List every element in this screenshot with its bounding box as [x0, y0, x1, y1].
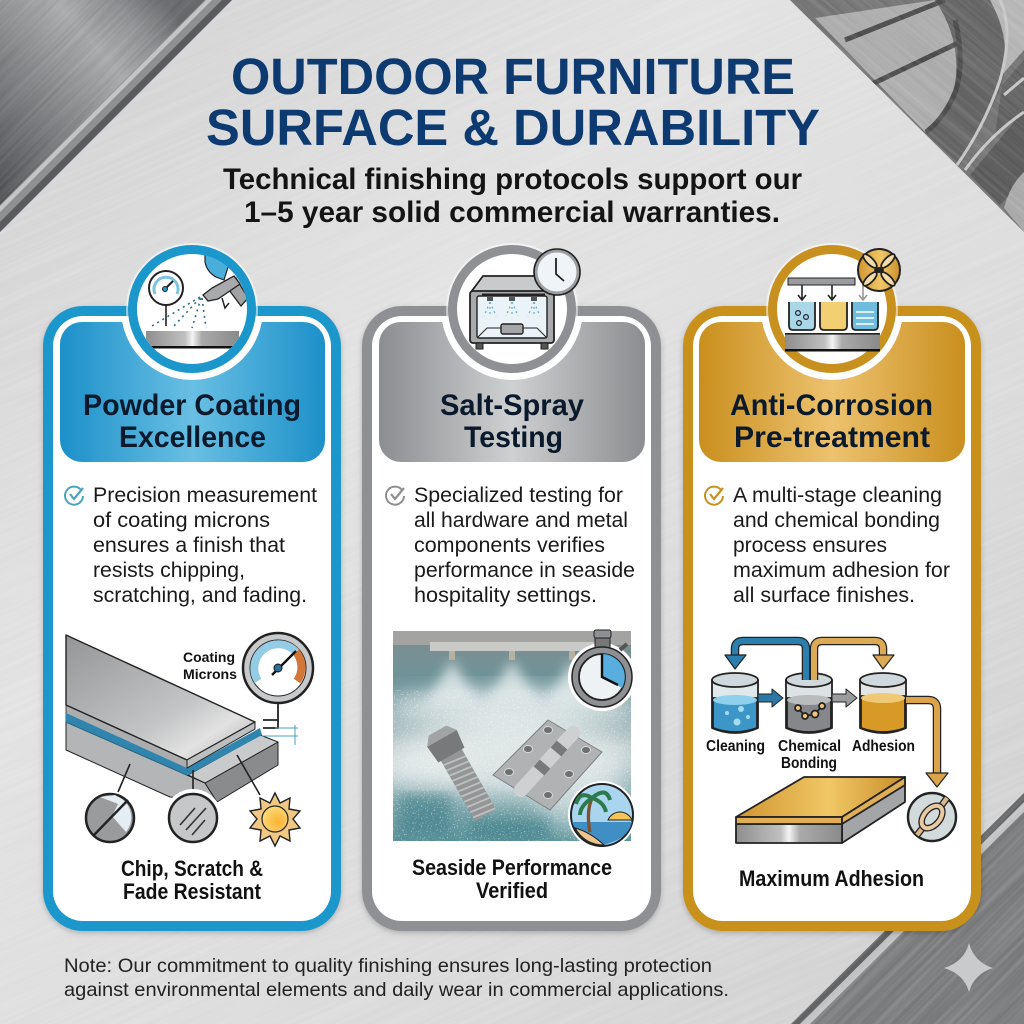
title: SURFACE & DURABILITY: [206, 99, 820, 156]
caption: Fade Resistant: [123, 879, 262, 904]
label: chemical bonding: Bonding: [781, 755, 837, 772]
icon: sparkle: [944, 943, 993, 992]
panel: salt-spray testing: [362, 238, 661, 931]
body text: [733, 484, 950, 607]
top-left steel corner: [0, 0, 232, 232]
body text: ensures a finish that: [93, 534, 285, 557]
bottom-right textured metal corner: [791, 793, 1024, 1024]
card frame: [43, 306, 341, 931]
icon: check: [386, 487, 404, 505]
icon: chain link: [908, 793, 956, 841]
heading: [440, 389, 584, 454]
footnote: against environmental elements and daily wear in commercial applications.: [64, 979, 729, 1001]
icon: stopwatch: [568, 630, 636, 711]
heading: Excellence: [119, 421, 266, 454]
footnote: Note: Our commitment to quality finishing ensures long-lasting protection: [64, 955, 712, 977]
body text: and chemical bonding: [733, 509, 940, 532]
arrow: blue to bonding: [758, 689, 783, 707]
icon: bolt: [427, 726, 496, 821]
card frame: [683, 306, 981, 931]
coating microns label: Microns: [183, 666, 237, 682]
beaker: adhesion: [860, 673, 906, 733]
body text: components verifies: [414, 534, 605, 557]
label: chemical bonding: [778, 738, 841, 772]
subtitle: Technical finishing protocols support our: [223, 163, 802, 196]
body text: Precision measurement: [93, 484, 317, 507]
card frame: [362, 306, 661, 931]
label: adhesion: Adhesion: [852, 738, 915, 755]
arrow: blue return to cleaning: [725, 641, 806, 680]
heading: Powder Coating: [83, 389, 301, 422]
caption: [412, 855, 612, 903]
icon: chip: [86, 764, 134, 842]
header band: [379, 322, 645, 462]
title: [206, 48, 820, 156]
body text: all hardware and metal: [414, 509, 628, 532]
icon: hinge: [493, 720, 602, 810]
footnote: [64, 955, 729, 1001]
beaker: chemical bonding: [786, 673, 832, 733]
body text: performance in seaside: [414, 559, 635, 582]
caption: Seaside Performance: [412, 855, 612, 880]
body text: [93, 484, 317, 607]
heading: [83, 389, 301, 454]
panel: powder coating: [43, 238, 341, 931]
body text: Specialized testing for: [414, 484, 623, 507]
icon: check: [705, 487, 723, 505]
beaker: cleaning: [712, 673, 758, 733]
body text: hospitality settings.: [414, 584, 597, 607]
body text: resists chipping,: [93, 559, 245, 582]
heading: Anti-Corrosion: [730, 389, 933, 422]
heading: [730, 389, 933, 454]
diagram: process beakers: [712, 641, 956, 843]
arrow: gold to adhesion: [814, 641, 894, 680]
header band: [699, 322, 965, 462]
arrow: grey to adhesion: [832, 689, 857, 707]
diagram: coated metal bar: [66, 635, 278, 802]
icon: salt spray chamber: [441, 238, 583, 380]
subtitle: [223, 163, 802, 229]
caption: Maximum Adhesion: [739, 866, 924, 891]
caption: Verified: [476, 878, 548, 903]
body text: A multi-stage cleaning: [733, 484, 942, 507]
photo: salt spray chamber with hardware: [393, 631, 631, 841]
coating microns label: [183, 649, 237, 682]
icon: scratch: [164, 770, 222, 847]
label: cleaning: Cleaning: [706, 738, 765, 755]
top-right textured metal corner: [790, 0, 1024, 232]
arrow: to bonded plate: [906, 700, 948, 787]
coating microns label: Coating: [183, 649, 235, 665]
caption: [121, 856, 263, 904]
label: chemical bonding: Chemical: [778, 738, 841, 755]
body text: maximum adhesion for: [733, 559, 950, 582]
icon: sun: [237, 755, 300, 846]
body text: scratching, and fading.: [93, 584, 307, 607]
caption: Chip, Scratch &: [121, 856, 263, 881]
icon: immersion tanks: [761, 238, 903, 380]
subtitle: 1–5 year solid commercial warranties.: [244, 196, 780, 229]
body text: all surface finishes.: [733, 584, 915, 607]
heading: Testing: [464, 421, 563, 454]
header band: [60, 322, 325, 462]
icon: spray gun and gauge: [121, 238, 263, 380]
icon: check: [65, 487, 83, 505]
heading: Salt-Spray: [440, 389, 584, 422]
panel: anti-corrosion pre-treatment: [683, 238, 981, 931]
title: OUTDOOR FURNITURE: [231, 48, 795, 105]
body text: process ensures: [733, 534, 887, 557]
icon: gold-coated plate: [736, 777, 905, 843]
icon: beach: [568, 781, 636, 849]
body text: of coating microns: [93, 509, 270, 532]
heading: Pre-treatment: [734, 421, 930, 454]
icon: thickness gauge: [243, 633, 313, 745]
body text: [414, 484, 635, 607]
